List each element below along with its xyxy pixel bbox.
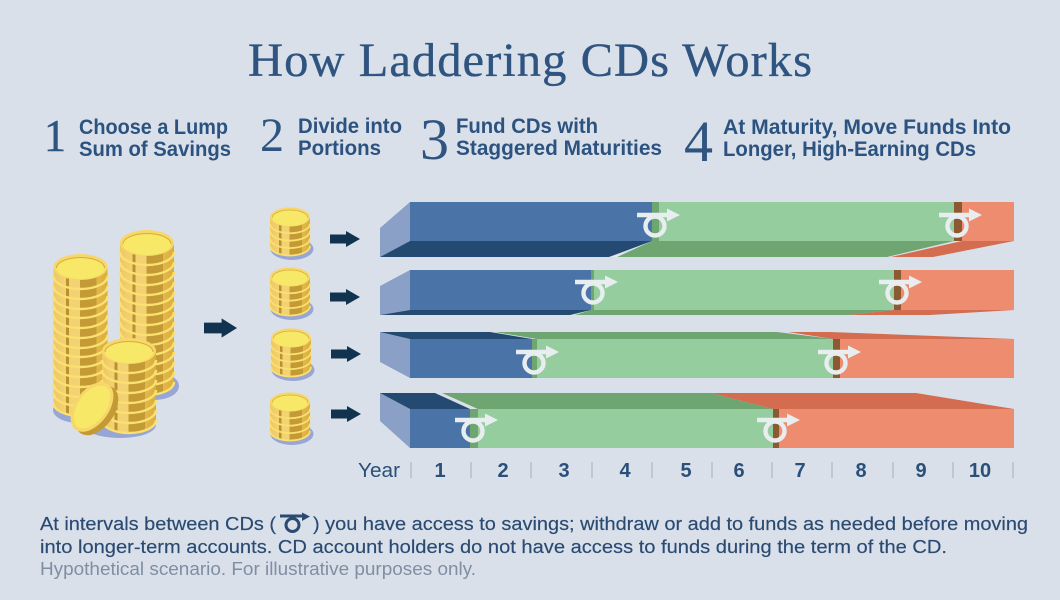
- year axis: 1: [434, 460, 446, 482]
- icon: small coin stack row 1: [270, 207, 314, 260]
- icon: small coin stack row 4: [270, 392, 314, 445]
- footer note: [40, 512, 1028, 579]
- icon: large coin stacks: [53, 230, 179, 443]
- icon: access loop: [280, 512, 310, 532]
- ladder row 2: [380, 270, 1014, 315]
- icon: small coin stack row 3: [271, 328, 314, 381]
- year axis: 5: [680, 460, 692, 482]
- footer note: Hypothetical scenario. For illustrative purposes only.: [40, 559, 476, 579]
- step 2 heading: [260, 109, 402, 162]
- arrow row 2: [330, 289, 360, 305]
- arrow: lump sum to portions: [204, 318, 237, 338]
- step 3 heading: Fund CDs with: [456, 115, 598, 138]
- step 4 heading: [684, 109, 1011, 174]
- footer note: ) you have access to savings; withdraw or add to funds as needed before moving: [313, 514, 1028, 534]
- step 4 heading: At Maturity, Move Funds Into: [723, 116, 1011, 139]
- step 4 heading: Longer, High-Earning CDs: [723, 138, 976, 161]
- arrow row 3: [331, 346, 361, 362]
- arrow row 1: [330, 231, 360, 247]
- step 3 heading: Staggered Maturities: [456, 137, 662, 160]
- year axis: 6: [733, 460, 745, 482]
- step 1 heading: Sum of Savings: [79, 138, 231, 161]
- year axis: 3: [558, 460, 570, 482]
- ladder row 4: [380, 393, 1014, 448]
- year axis: 9: [915, 460, 927, 482]
- step 2 heading: Divide into: [298, 115, 402, 138]
- year axis: 8: [855, 460, 867, 482]
- step 1 heading: 1: [44, 110, 66, 161]
- title: How Laddering CDs Works: [248, 34, 813, 87]
- step 1 heading: [44, 110, 231, 161]
- year axis: [358, 460, 1013, 482]
- year axis: 10: [969, 460, 991, 482]
- year axis: 2: [497, 460, 509, 482]
- arrow row 4: [331, 406, 361, 422]
- year axis: 4: [619, 460, 631, 482]
- step 1 heading: Choose a Lump: [79, 116, 228, 139]
- year axis: 7: [794, 460, 806, 482]
- step 3 heading: [420, 107, 662, 172]
- icon: small coin stack row 2: [270, 267, 314, 320]
- year axis: Year: [358, 460, 400, 482]
- step 3 heading: 3: [420, 107, 449, 172]
- step 2 heading: 2: [260, 109, 284, 162]
- footer note: into longer-term accounts. CD account holders do not have access to funds during the term of the CD.: [40, 537, 947, 557]
- ladder row 1: [380, 202, 1014, 257]
- step 2 heading: Portions: [298, 137, 381, 160]
- step 4 heading: 4: [684, 109, 713, 174]
- footer note: At intervals between CDs (: [40, 514, 276, 534]
- ladder row 3: [380, 332, 1014, 378]
